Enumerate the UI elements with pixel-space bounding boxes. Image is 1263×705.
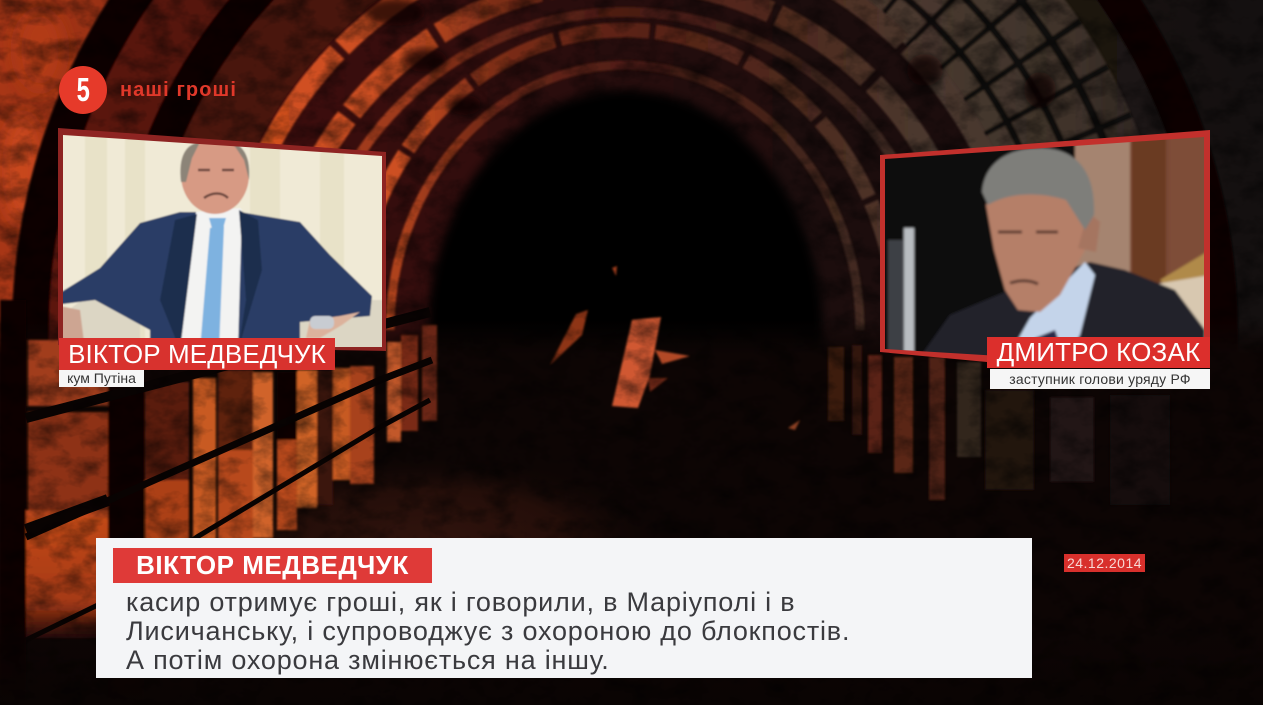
vault ribs [225, 0, 1025, 330]
right wall dim strips [828, 345, 1170, 505]
lower half dark wall [0, 320, 1263, 705]
logo circle with 5 [59, 66, 107, 114]
tunnel floor [200, 455, 660, 625]
channel name: наші гроші [120, 79, 237, 101]
quote text: касир отримує гроші, як і говорили, в Маріуполі і в [126, 587, 795, 617]
caption: Dmytro Kozak [990, 369, 1210, 389]
dark centre of the tunnel [427, 90, 823, 580]
caption: Viktor Medvedchuk: кум Путіна [67, 370, 136, 386]
panel: Dmytro Kozak photo [880, 130, 1210, 362]
fire in the tunnel [550, 266, 800, 430]
dark blotches on the lit ribs [365, 0, 1056, 115]
quote text: Лисичанську, і супроводжує з охороною до блокпостів. [126, 616, 850, 646]
quote speaker label: ВІКТОР МЕДВЕДЧУК [136, 550, 409, 580]
panel: quotation box [96, 538, 1032, 678]
name plate: Dmytro Kozak: ДМИТРО КОЗАК [997, 337, 1200, 367]
brick lattice on the right side of the vault [625, 0, 1140, 330]
far-left lit wall patches [2, 10, 64, 225]
concentric tunnel bands [12, 0, 1238, 360]
quote text: А потім охорона змінюється на іншу. [126, 645, 610, 675]
name plate: Viktor Medvedchuk: ВІКТОР МЕДВЕДЧУК [68, 339, 326, 369]
left railing panels [0, 300, 437, 705]
panel: Viktor Medvedchuk photo [58, 128, 386, 351]
quote text [126, 587, 850, 675]
date tag: 24.12.2014 [1067, 555, 1142, 571]
logo circle with 5: 5 [76, 71, 90, 108]
caption: Dmytro Kozak: заступник голови уряду РФ [1009, 371, 1191, 387]
railing bars [26, 312, 432, 640]
